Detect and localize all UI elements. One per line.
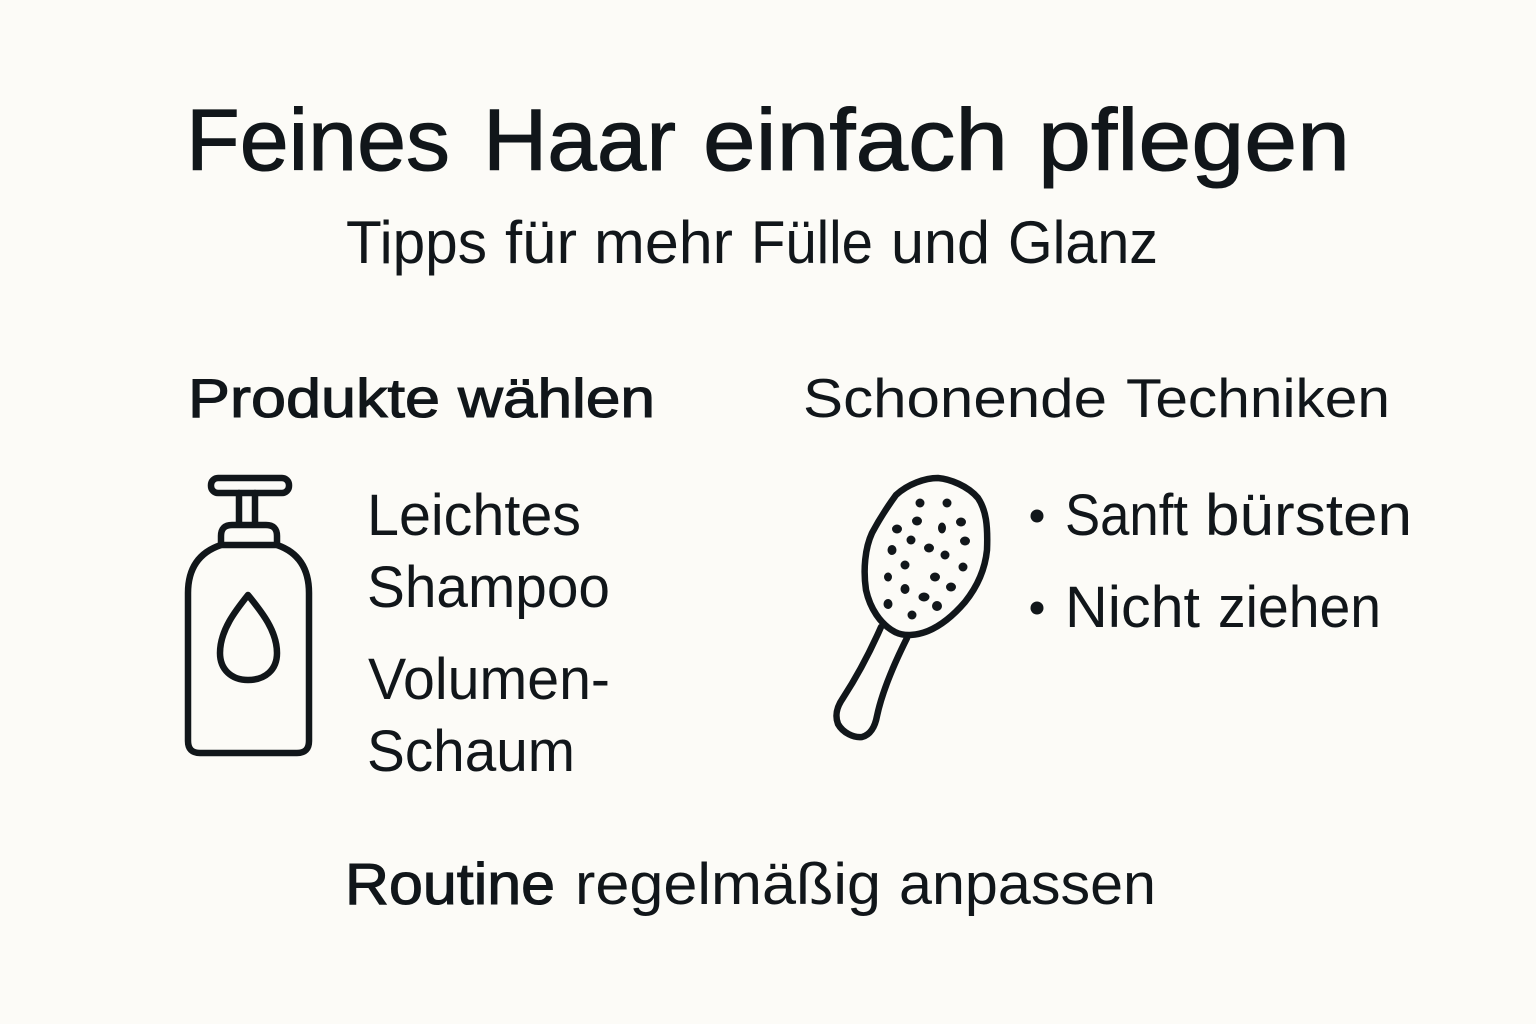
subtitle: und [891, 209, 990, 276]
title: Feines [186, 92, 450, 189]
bullet: Nicht ziehen [1030, 575, 1381, 640]
product list: Leichtes [367, 483, 581, 548]
bullet: Sanft bürsten: Sanft [1065, 483, 1188, 548]
title: Haar [483, 92, 676, 189]
product list [367, 483, 610, 784]
product list: Schaum [367, 719, 575, 784]
subtitle: Glanz [1008, 209, 1158, 276]
heading: techniques: Schonende [803, 367, 1107, 429]
subtitle: mehr [594, 209, 733, 276]
subtitle: Fülle [751, 209, 873, 276]
icon: hair brush [836, 478, 987, 737]
subtitle: Tipps [346, 209, 487, 276]
icon: pump bottle with drop [188, 478, 309, 753]
bullet: Nicht ziehen: Nicht [1065, 575, 1200, 640]
subtitle: für [505, 209, 577, 276]
title: pflegen [1038, 92, 1350, 189]
heading: techniques: Techniken [1126, 367, 1390, 429]
panel: products [188, 367, 655, 784]
product list: Volumen- [368, 647, 610, 712]
title: einfach [703, 92, 1008, 189]
heading: products: wählen [457, 367, 655, 429]
footer line: Routine [345, 852, 555, 917]
bullet: Sanft bürsten: bürsten [1205, 483, 1412, 548]
bullet: Nicht ziehen: ziehen [1218, 575, 1381, 640]
bullet: Sanft bürsten [1030, 483, 1412, 548]
product list: Shampoo [367, 555, 610, 620]
subtitle [346, 209, 1158, 276]
heading: products [188, 367, 655, 429]
footer line [345, 852, 1156, 917]
panel: techniques [803, 367, 1412, 737]
title [186, 92, 1350, 189]
heading: techniques [803, 367, 1390, 429]
heading: products: Produkte [188, 367, 440, 429]
footer line: regelmäßig [575, 852, 881, 917]
footer line: anpassen [899, 852, 1156, 917]
